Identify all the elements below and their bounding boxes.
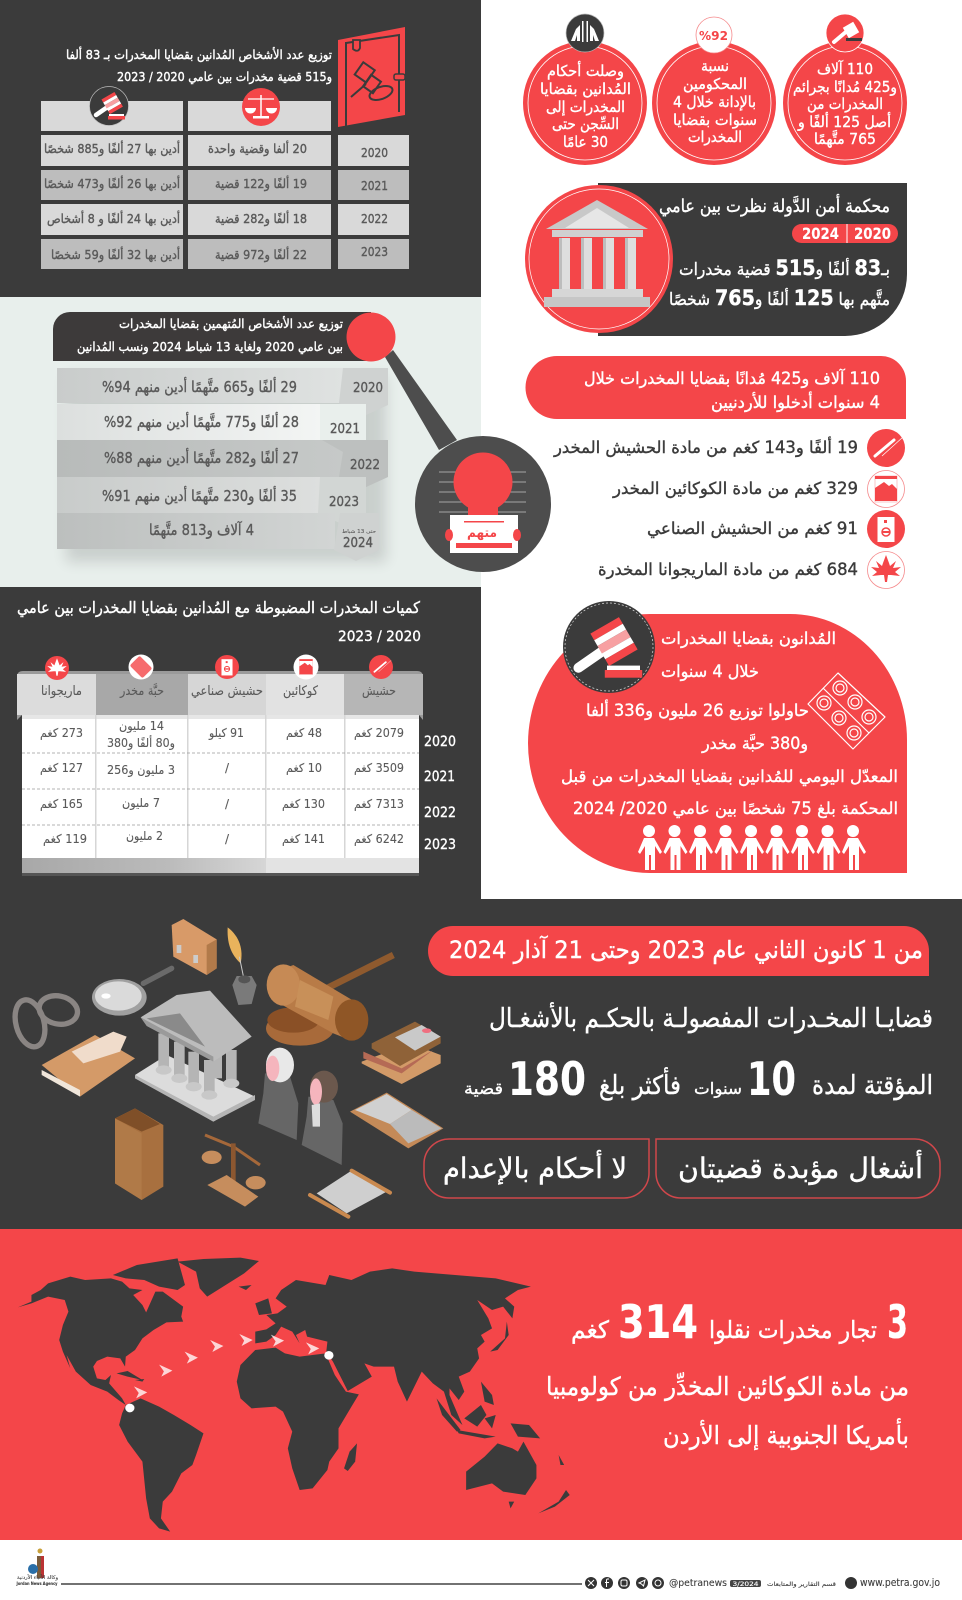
icon: large gavel xyxy=(563,601,655,693)
box: no death sentences: لا أحكام بالإعدام xyxy=(443,1149,627,1185)
table body: 3509 كغم xyxy=(354,761,404,775)
table rows: أدين بها 24 ألفًا و 8 أشخاص xyxy=(47,210,180,227)
panel: convicted over four years: خلال 4 سنوات xyxy=(661,662,759,682)
stat circle: conviction rate: بالإدانة خلال 4 xyxy=(673,93,756,111)
table body: / xyxy=(225,832,230,846)
table rows: 20 ألفا وقضية واحدة xyxy=(208,140,307,157)
icon: percent badge xyxy=(696,17,732,53)
bars xyxy=(57,368,388,561)
table rows: 19 ألفًا و122 قضية xyxy=(215,175,307,192)
stat circle: conviction rate: سنوات بقضايا xyxy=(673,111,757,129)
panel: convicted over four years xyxy=(528,601,907,873)
stat circle: prison sentences: وصلت أحكام xyxy=(547,61,624,80)
footer text: @petranews xyxy=(669,1578,727,1589)
panel: convicted persons table xyxy=(0,0,481,297)
logo: Petra agency: Jordan News Agency xyxy=(16,1581,58,1587)
panel: convicted over four years: المُدانون بقضايا المخدرات xyxy=(661,629,836,649)
list: drugs seized: 684 كغم من مادة الماريجوانا المخدرة xyxy=(598,560,858,580)
stat circle: conviction rate: نسبة xyxy=(701,57,729,75)
stat circle: convicted total: و425 مُدانًا بجرائم xyxy=(793,78,897,96)
icon: gavel on red xyxy=(826,14,864,52)
bars: 2020 xyxy=(353,380,383,396)
box: life sentences xyxy=(656,1139,940,1198)
stat circle: convicted total: 765 متَّهمًا xyxy=(814,130,876,148)
title: و515 قضية مخدرات بين عامي 2020 / 2023 xyxy=(117,69,332,85)
big numbers line: سنوات xyxy=(694,1079,742,1099)
footer text: www.petra.gov.jo xyxy=(860,1576,940,1589)
bars: 2023 xyxy=(329,494,359,510)
year pill: 2020 xyxy=(854,224,891,243)
panel: state security court: محكمة أمن الدَّولة نظرت بين عامي xyxy=(659,194,890,217)
route text: بأمريكا الجنوبية إلى الأردن xyxy=(663,1417,909,1451)
callout: convicted Jordanians: 4 سنوات أدخلوا للأردنيين xyxy=(711,391,880,413)
table header: حشيش صناعي xyxy=(191,684,263,699)
list: drugs seized: 19 ألفًا و143 كغم من مادة الحشيش المخدر xyxy=(553,436,858,458)
table header: حشيش xyxy=(362,684,396,699)
route arrows xyxy=(134,1334,319,1398)
box: no death sentences xyxy=(424,1139,649,1198)
bars: 27 ألفًا و282 متَّهمًا أدين منهم 88% xyxy=(104,448,299,467)
table body: 119 كغم xyxy=(43,832,87,846)
panel: convicted over four years: المحكمة بلغ 75 شخصًا بين عامي 2020/ 2024 xyxy=(573,799,898,819)
icon: gavel xyxy=(90,86,128,126)
panel: accused persons distribution xyxy=(0,297,481,587)
route text xyxy=(546,1295,909,1451)
table rows: 2021 xyxy=(361,179,388,193)
table footer xyxy=(22,858,419,876)
bars: 28 ألفًا و775 متَّهمًا أدين منهم 92% xyxy=(104,412,299,431)
table body: / xyxy=(225,761,230,775)
row years xyxy=(424,734,456,853)
stat circle: convicted total: المخدرات من xyxy=(807,95,883,113)
icon: synthetic hashish xyxy=(867,510,905,548)
footer xyxy=(16,1548,940,1589)
table body: 6242 كغم xyxy=(354,832,404,846)
bars: 2024 xyxy=(343,535,373,551)
title: كميات المخدرات المضبوطة مع المُدانين بقضايا المخدرات بين عامي xyxy=(17,598,420,618)
panel: state security court: بـ83 ألفًا و515 قضية مخدرات xyxy=(679,256,890,280)
big numbers line: 180 xyxy=(508,1052,586,1106)
route text: تجار مخدرات نقلوا xyxy=(709,1316,877,1344)
bars: حتى 13 شباط xyxy=(342,529,376,535)
stat circle: convicted total: أصل 125 ألفًا و xyxy=(797,112,891,131)
bars: 4 آلاف و813 متَّهمًا xyxy=(149,521,254,539)
callout: convicted Jordanians: 110 آلاف و425 مُدانًا بقضايا المخدرات خلال xyxy=(584,369,880,389)
route text: كغم xyxy=(571,1316,610,1344)
route text: من مادة الكوكائين المخدِّر من كولومبيا xyxy=(546,1371,909,1401)
table body: / xyxy=(225,797,230,811)
year pill: 2024 xyxy=(802,224,839,243)
social icons xyxy=(585,1577,857,1589)
bars: 2022 xyxy=(350,457,380,473)
table rows: 18 ألفًا و282 قضية xyxy=(215,210,307,227)
header banner: توزيع عدد الأشخاص المُتهمين بقضايا المخدرات xyxy=(119,316,343,332)
table body: 141 كغم xyxy=(282,832,325,846)
world map xyxy=(18,1258,570,1532)
table body: 3 مليون و256 xyxy=(107,763,175,778)
footer text xyxy=(669,1576,940,1589)
title: توزيع عدد الأشخاص المُدانين بقضايا المخدرات بـ 83 ألفا xyxy=(66,46,332,63)
big numbers line: فأكثر بلغ xyxy=(599,1066,681,1101)
stat circle: conviction rate: المخدرات xyxy=(688,128,742,146)
table body: و80 ألفًا و380 xyxy=(107,735,175,751)
header banner xyxy=(53,312,371,361)
row years: 2022 xyxy=(424,805,456,821)
panel: state security court xyxy=(525,183,907,336)
bars: 35 ألفًا و230 متَّهمًا أدين منهم 91% xyxy=(102,486,297,505)
footer text: قسم التقارير والمتابعات xyxy=(767,1581,836,1588)
table body: 273 كغم xyxy=(40,726,83,740)
table header: كوكائين xyxy=(283,684,319,699)
icon: scales xyxy=(242,88,280,126)
route text: 3 xyxy=(887,1295,908,1349)
row years: 2021 xyxy=(424,769,455,785)
table rows: أدين بها 26 ألفًا و473 شخصًا xyxy=(44,175,180,192)
table header xyxy=(17,671,423,720)
row years: 2020 xyxy=(424,734,456,750)
icon: percent badge: %92 xyxy=(699,28,728,43)
table body: 7 مليون xyxy=(122,796,160,811)
route text: 314 xyxy=(618,1295,698,1349)
icon row: people xyxy=(638,825,866,870)
icon: hashish xyxy=(867,429,905,467)
big numbers line: قضية xyxy=(464,1079,503,1098)
stat circle: prison sentences: السِّجن حتى xyxy=(552,115,619,133)
big numbers line: المؤقتة لمدة xyxy=(812,1071,933,1101)
stat circle: conviction rate: المحكومين xyxy=(683,75,747,93)
table rows: 2022 xyxy=(361,212,388,226)
big numbers line: 10 xyxy=(747,1052,796,1106)
table header: حبَّة مخدر xyxy=(119,682,164,699)
footer text: 3/2024 xyxy=(732,1581,759,1588)
icon: accused magnifier xyxy=(346,312,551,572)
table body: 2079 كغم xyxy=(354,726,404,740)
table body: 91 كيلو xyxy=(208,726,244,741)
panel: seized drugs table xyxy=(0,587,481,899)
logo: Petra agency xyxy=(16,1548,59,1587)
list: drugs seized: 91 كغم من الحشيش الصناعي xyxy=(647,519,858,539)
title: 2020 / 2023 xyxy=(338,629,421,645)
panel: smuggling route xyxy=(0,1229,962,1540)
panel: convicted over four years: المعدّل اليومي للمُدانين بقضايا المخدرات من قبل xyxy=(561,767,898,787)
icon: red door with gavel xyxy=(338,27,405,127)
title xyxy=(17,598,421,645)
row years: 2023 xyxy=(424,837,456,853)
stat circle: convicted total: 110 آلاف xyxy=(817,60,873,78)
icon: cocaine xyxy=(868,470,904,508)
table rows: أدين بها 27 ألفًا و885 شخصًا xyxy=(44,140,180,157)
illustration: justice objects xyxy=(10,919,443,1217)
year pill xyxy=(792,224,898,243)
date banner: من 1 كانون الثاني عام 2023 وحتى 21 آذار 2024 xyxy=(449,935,923,964)
icon: courthouse xyxy=(544,200,650,307)
stat circle: prison sentences: 30 عامًا xyxy=(563,133,608,151)
table body: 7313 كغم xyxy=(354,797,404,811)
table body: 14 مليون xyxy=(119,719,164,734)
icon: accused magnifier: متهم xyxy=(467,526,497,541)
table rows: أدين بها 32 ألفًا و59 شخصًا xyxy=(51,246,180,263)
table rows: 22 ألفًا و972 قضية xyxy=(215,246,307,263)
table header cells xyxy=(41,101,331,131)
stat circle: prison sentences: المخدرات إلى xyxy=(546,98,625,116)
panel: state security court: متَّهم بها 125 ألفًا و765 شخصًا xyxy=(669,286,890,310)
box: life sentences: أشغال مؤبدة قضيتان xyxy=(678,1149,923,1185)
icon: pill pack xyxy=(808,673,885,749)
stat circle: conviction rate xyxy=(652,17,776,165)
logo: Petra agency: وكالة الأنباء الأردنية xyxy=(17,1574,59,1581)
table body: 2 مليون xyxy=(126,829,163,844)
table body: 10 كغم xyxy=(286,761,322,775)
list: drugs seized xyxy=(553,429,905,588)
table body: 130 كغم xyxy=(282,797,325,811)
table header: ماريجوانا xyxy=(41,684,82,699)
stat circle: prison sentences: المُدانين بقضايا xyxy=(540,80,631,98)
callout: convicted Jordanians xyxy=(526,356,906,419)
table icons xyxy=(45,654,393,680)
title xyxy=(66,46,332,85)
panel: convicted over four years: و380 حبَّة مخدر xyxy=(701,734,808,754)
table body: 165 كغم xyxy=(40,797,83,811)
table body: 48 كغم xyxy=(286,726,322,740)
bars: 2021 xyxy=(330,421,360,437)
table rows: 2023 xyxy=(361,245,388,259)
stat circle: convicted total xyxy=(783,14,907,165)
icon: prison figures xyxy=(566,14,604,52)
table rows: 2020 xyxy=(361,146,388,160)
icon: marijuana xyxy=(868,552,904,588)
header banner: بين عامي 2020 ولغاية 13 شباط 2024 ونسب المُدانين xyxy=(77,339,343,355)
panel: sentences xyxy=(0,899,962,1229)
table rows xyxy=(41,135,409,269)
bars: 29 ألفًا و665 متَّهمًا أدين منهم 94% xyxy=(102,377,297,396)
list: drugs seized: 329 كغم من مادة الكوكائين المخدر xyxy=(612,479,858,499)
date banner xyxy=(428,926,929,976)
panel: convicted over four years: حاولوا توزيع 26 مليون و336 ألفا xyxy=(586,699,809,721)
table body: 127 كغم xyxy=(40,761,83,775)
stat circle: prison sentences xyxy=(523,14,647,165)
big numbers line xyxy=(464,1052,933,1106)
table body xyxy=(22,715,419,858)
